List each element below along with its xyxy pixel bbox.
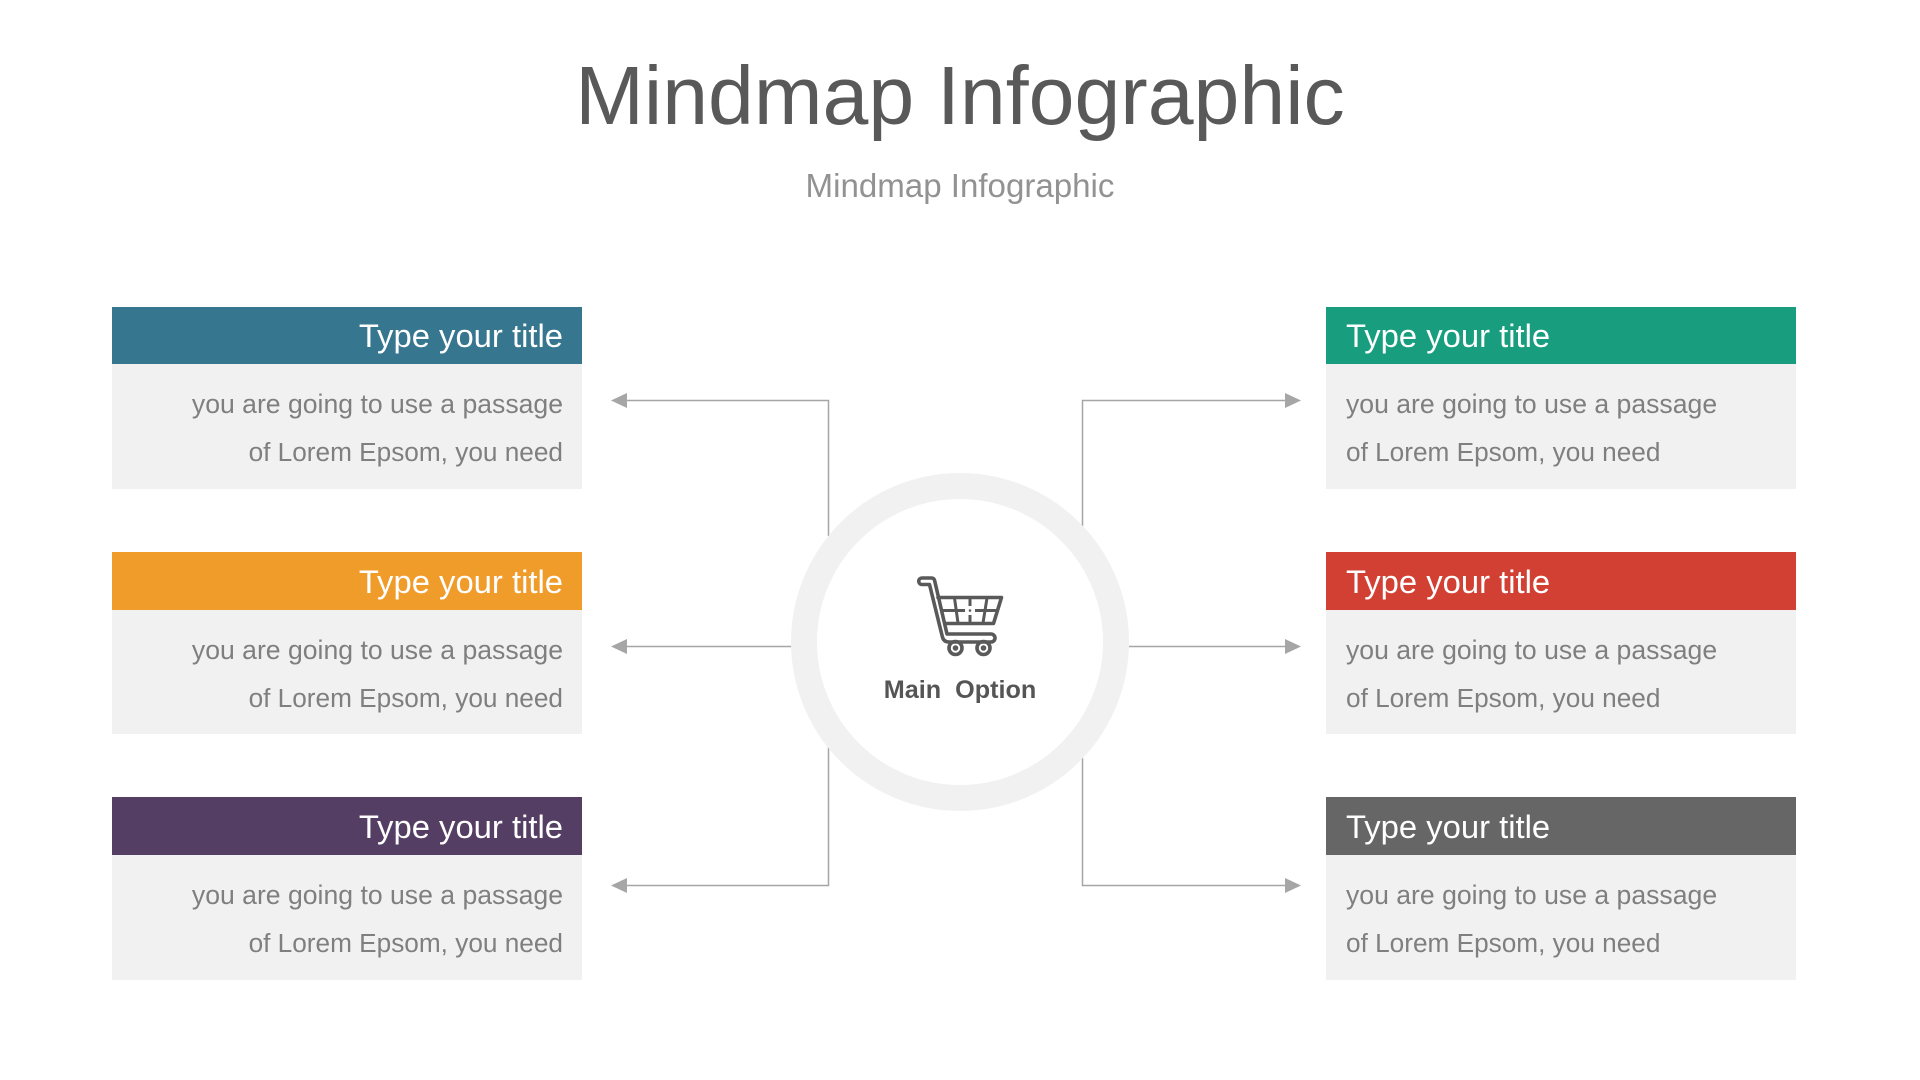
heading: Type your title: [359, 317, 563, 354]
header bar: [1326, 797, 1796, 855]
text block: you are going to use a passage: [192, 635, 563, 665]
heading: Type your title: [1346, 563, 1550, 600]
panel: middle left: [112, 552, 582, 734]
subtitle: Mindmap Infographic: [806, 168, 1114, 205]
text block: of Lorem Epsom, you need: [1346, 928, 1660, 958]
body box: [1326, 364, 1796, 489]
heading: Type your title: [359, 808, 563, 845]
heading: Type your title: [1346, 808, 1550, 845]
body box: [112, 364, 582, 489]
heading: Type your title: [1346, 317, 1550, 354]
arrow: to middle right: [1129, 639, 1301, 654]
panel: top right: [1326, 307, 1796, 489]
panel: bottom right: [1326, 797, 1796, 980]
header bar: [1326, 307, 1796, 364]
arrow: to top left: [611, 393, 828, 536]
arrow: to bottom right: [1082, 758, 1301, 893]
icon: shopping cart: [919, 578, 1002, 654]
panel: top left: [112, 307, 582, 489]
text block: of Lorem Epsom, you need: [1346, 437, 1660, 467]
text block: you are going to use a passage: [192, 389, 563, 419]
header bar: [112, 797, 582, 855]
text block: you are going to use a passage: [1346, 389, 1717, 419]
body box: [112, 610, 582, 734]
text block: you are going to use a passage: [1346, 635, 1717, 665]
body box: [1326, 855, 1796, 980]
panel: middle right: [1326, 552, 1796, 734]
text block: of Lorem Epsom, you need: [249, 928, 563, 958]
header bar: [112, 307, 582, 364]
text block: of Lorem Epsom, you need: [249, 683, 563, 713]
heading: Type your title: [359, 563, 563, 600]
central label: Main Option: [884, 676, 1036, 704]
text block: you are going to use a passage: [192, 880, 563, 910]
header bar: [1326, 552, 1796, 610]
central node ring: [804, 486, 1116, 798]
body box: [1326, 610, 1796, 734]
header bar: [112, 552, 582, 610]
text block: you are going to use a passage: [1346, 880, 1717, 910]
arrow: to top right: [1082, 393, 1301, 526]
text block: of Lorem Epsom, you need: [1346, 683, 1660, 713]
arrow: to middle left: [611, 639, 792, 654]
text block: of Lorem Epsom, you need: [249, 437, 563, 467]
title: Mindmap Infographic: [575, 50, 1345, 142]
body box: [112, 855, 582, 980]
panel: bottom left: [112, 797, 582, 980]
arrow: to bottom left: [611, 747, 828, 893]
